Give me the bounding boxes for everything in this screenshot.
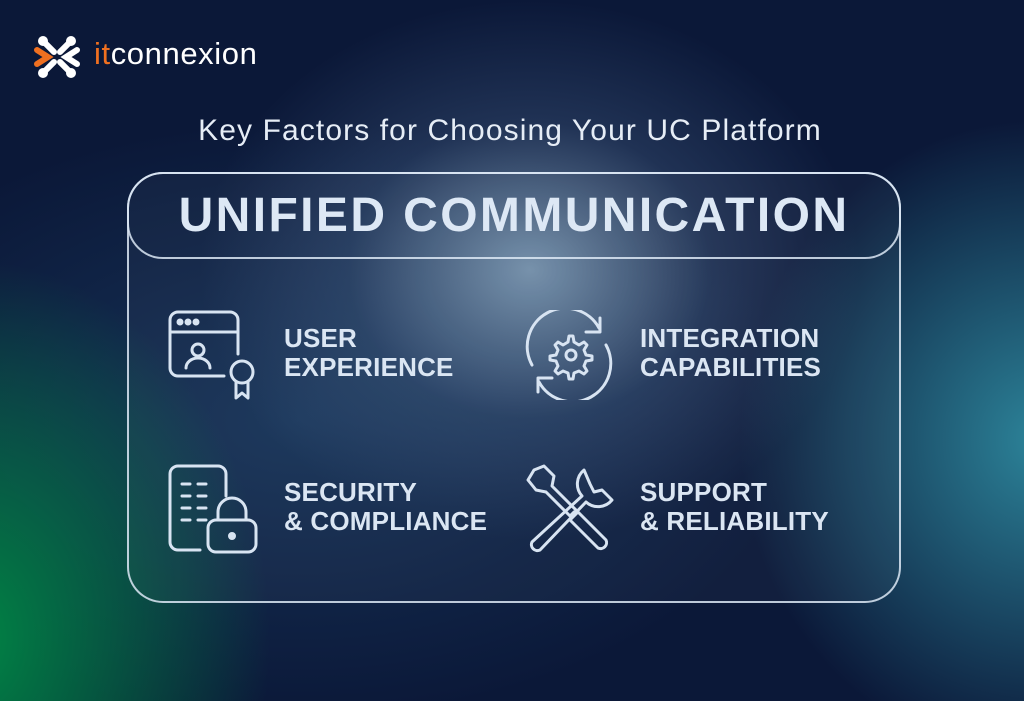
heading pill: UNIFIED COMMUNICATION	[179, 189, 849, 242]
text: support: SUPPORT	[640, 477, 767, 507]
text: integration: INTEGRATION	[640, 323, 819, 353]
icon: support	[526, 464, 614, 552]
text: support	[640, 477, 829, 536]
icon: user experience	[168, 310, 254, 400]
text: integration	[640, 323, 821, 382]
logo	[34, 36, 257, 78]
panel: main box	[127, 172, 901, 603]
text: security: SECURITY	[284, 477, 417, 507]
text: user experience	[284, 323, 454, 382]
text: user experience: EXPERIENCE	[284, 352, 454, 382]
text: support: & RELIABILITY	[640, 506, 829, 536]
subtitle: Key Factors for Choosing Your UC Platform	[198, 114, 822, 147]
text: user experience: USER	[284, 323, 357, 353]
icon: integration	[526, 310, 612, 400]
brand name: itconnexion	[94, 36, 257, 71]
icon: security	[168, 464, 258, 554]
text: integration: CAPABILITIES	[640, 352, 821, 382]
icon: logo mark	[34, 36, 80, 78]
heading pill	[127, 172, 901, 259]
text: security	[284, 477, 487, 536]
text: security: & COMPLIANCE	[284, 506, 487, 536]
